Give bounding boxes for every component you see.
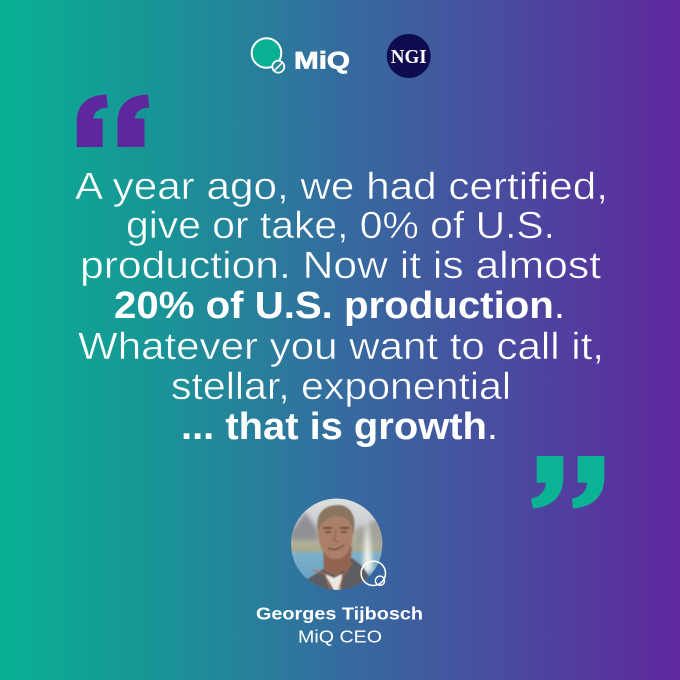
quote text: Whatever you want to call it, xyxy=(78,326,604,368)
speaker title: MiQ CEO xyxy=(298,627,382,647)
quote text: A year ago, we had certified, xyxy=(75,166,608,208)
quote text xyxy=(75,166,608,448)
portrait photo xyxy=(290,497,385,592)
quote text: stellar, exponential xyxy=(171,366,511,408)
logo: NGI: NGI xyxy=(391,46,427,68)
logo: MiQ: MiQ xyxy=(294,48,350,74)
portrait badge: MiQ mark xyxy=(361,561,385,586)
quote text: 20% of U.S. production . xyxy=(114,285,565,327)
quote text: ... that is growth . xyxy=(181,406,498,448)
logo: NGI xyxy=(387,34,431,78)
logo: MiQ xyxy=(252,38,350,74)
speaker name: Georges Tijbosch xyxy=(256,604,423,624)
opening quotation mark xyxy=(77,94,149,147)
quote text: give or take, 0% of U.S. xyxy=(126,205,555,247)
quote text: production. Now it is almost xyxy=(80,245,601,287)
closing quotation mark xyxy=(531,456,604,508)
